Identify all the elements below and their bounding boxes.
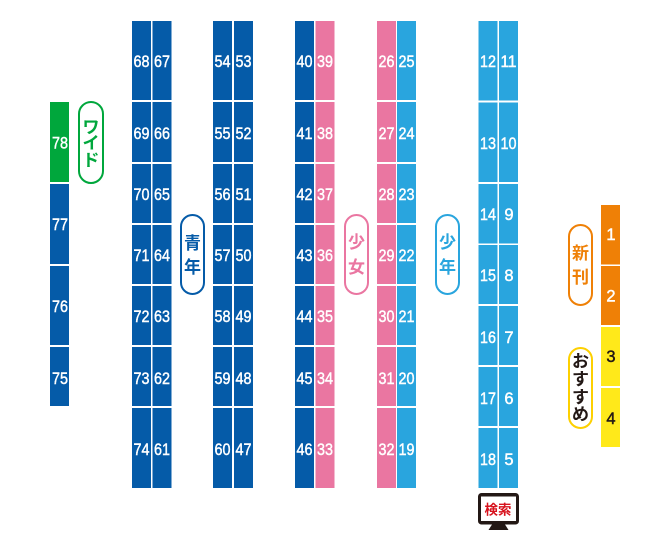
shelf column: 19-25: 24 [398, 125, 414, 143]
shelf column: 68-74: 74 [134, 441, 150, 459]
shelf column: 33-39: 39 [317, 53, 333, 71]
shelf column: 61-67: 63 [154, 308, 170, 326]
shelf column: 19-25: 23 [398, 186, 414, 204]
shelf column: 1-4: 4 [606, 410, 616, 428]
shelf column: wide 75-78: 77 [52, 216, 68, 234]
shelf column: 5-11: 9 [504, 206, 514, 224]
label: wide: イ [82, 134, 100, 153]
shelf column: 5-11: 5 [504, 451, 514, 469]
label: new releases: 新 [572, 244, 589, 263]
shelf column: 40-46: 42 [296, 186, 312, 204]
shelf column: 68-74: 69 [134, 125, 150, 143]
label: shoujo: 少 [348, 233, 365, 252]
shelf column: 26-32: 29 [378, 247, 394, 265]
shelf column: 12-18: 16 [480, 329, 496, 347]
shelf column: 54-60: 60 [214, 441, 230, 459]
shelf column: 19-25: 25 [398, 53, 414, 71]
shelf column: 19-25: 20 [398, 370, 414, 388]
shelf column: 33-39: 34 [317, 370, 333, 388]
shelf column: 33-39 [316, 21, 334, 488]
shelf column: 68-74: 73 [134, 370, 150, 388]
label: wide: ワ [82, 118, 100, 137]
shelf column: 12-18: 14 [480, 206, 496, 224]
shelf column: 26-32: 30 [378, 308, 394, 326]
shelf column: 26-32: 26 [378, 53, 394, 71]
shelf column: 33-39: 38 [317, 125, 333, 143]
shelf column: 1-4: 3 [606, 348, 616, 366]
label: new releases [569, 225, 592, 305]
shelf column: 19-25: 22 [398, 247, 414, 265]
label: shoujo [345, 215, 368, 294]
shelf column: 40-46: 45 [296, 370, 312, 388]
label: wide: ド [82, 151, 100, 170]
shelf column: 26-32: 28 [378, 186, 394, 204]
label: recommended [569, 348, 592, 428]
icon: search monitor [478, 493, 519, 530]
label: shounen [436, 215, 459, 294]
shelf column: 68-74: 68 [134, 53, 150, 71]
shelf column: 47-53: 50 [236, 247, 252, 265]
shelf column: wide 75-78: 75 [52, 370, 68, 388]
shelf column: 68-74 [132, 21, 151, 488]
shelf column: 47-53: 52 [236, 125, 252, 143]
shelf column: 40-46: 46 [296, 441, 312, 459]
shelf column: 54-60 [213, 21, 232, 488]
label: seinen [181, 215, 204, 294]
shelf column: 61-67: 66 [154, 125, 170, 143]
shelf column: 1-4 [601, 205, 620, 447]
shelf column: 54-60: 56 [214, 186, 230, 204]
shelf column: 40-46: 43 [296, 247, 312, 265]
shelf column: 12-18: 15 [480, 267, 496, 285]
shelf column: 68-74: 71 [134, 247, 150, 265]
shelf column: 5-11 [499, 21, 518, 488]
label: shoujo: 女 [348, 258, 365, 277]
shelf column: 47-53: 53 [236, 53, 252, 71]
shelf column: 12-18 [478, 21, 498, 488]
shelf column: 40-46: 44 [296, 308, 312, 326]
shelf column: 19-25: 21 [398, 308, 414, 326]
shelf column: 26-32: 27 [378, 125, 394, 143]
shelf column: 12-18: 17 [480, 390, 496, 408]
shelf column: 26-32: 32 [378, 441, 394, 459]
shelf column: 33-39: 36 [317, 247, 333, 265]
shelf column: 61-67: 64 [154, 247, 170, 265]
label: recommended: お [572, 352, 589, 371]
shelf column: 5-11: 10 [500, 135, 516, 153]
shelf column: 5-11: 6 [504, 390, 514, 408]
shelf column: 61-67: 62 [154, 370, 170, 388]
shelf column: 12-18: 18 [480, 451, 496, 469]
shelf column: 33-39: 35 [317, 308, 333, 326]
shelf column: 54-60: 54 [214, 53, 230, 71]
shelf column: 5-11: 7 [504, 329, 514, 347]
label: recommended: め [572, 405, 589, 424]
label: wide [79, 102, 103, 183]
shelf column: 61-67: 61 [154, 441, 170, 459]
shelf column: 47-53: 51 [236, 186, 252, 204]
shelf column: 12-18: 12 [480, 53, 496, 71]
label: seinen: 青 [184, 234, 201, 253]
shelf column: 40-46 [295, 21, 314, 488]
shelf column: 19-25 [397, 21, 416, 488]
shelf column: 40-46: 41 [296, 125, 312, 143]
shelf column: 47-53 [234, 21, 253, 488]
shelf column: wide 75-78: 76 [52, 298, 68, 316]
shelf column: 1-4: 2 [606, 288, 616, 306]
shelf column: 54-60: 59 [214, 370, 230, 388]
shelf column: 19-25: 19 [398, 441, 414, 459]
shelf column: 26-32 [377, 21, 396, 488]
shelf column: 61-67 [152, 21, 172, 488]
shelf column: 54-60: 57 [214, 247, 230, 265]
shelf column: 68-74: 72 [134, 308, 150, 326]
shelf column: 61-67: 65 [154, 186, 170, 204]
shelf column: 33-39: 33 [317, 441, 333, 459]
shelf column: 5-11: 8 [504, 267, 514, 285]
icon: search monitor: 検索 [484, 502, 512, 518]
shelf column: 54-60: 58 [214, 308, 230, 326]
shelf column: 68-74: 70 [134, 186, 150, 204]
shelf column: 40-46: 40 [296, 53, 312, 71]
shelf column: 5-11: 11 [500, 53, 516, 71]
label: shounen: 年 [439, 257, 456, 277]
label: recommended: す [572, 388, 589, 407]
label: seinen: 年 [184, 257, 201, 277]
shelf column: wide 75-78 [50, 102, 69, 406]
label: shounen: 少 [439, 233, 456, 252]
label: new releases: 刊 [572, 268, 589, 287]
shelf column: 47-53: 48 [236, 370, 252, 388]
shelf column: 33-39: 37 [317, 186, 333, 204]
label: recommended: す [572, 370, 589, 389]
shelf column: 54-60: 55 [214, 125, 230, 143]
shelf column: 61-67: 67 [154, 53, 170, 71]
shelf column: 26-32: 31 [378, 370, 394, 388]
shelf column: 47-53: 47 [236, 441, 252, 459]
shelf column: wide 75-78: 78 [52, 134, 68, 152]
shelf column: 47-53: 49 [236, 308, 252, 326]
shelf column: 1-4: 1 [606, 226, 616, 244]
shelf column: 12-18: 13 [480, 135, 496, 153]
